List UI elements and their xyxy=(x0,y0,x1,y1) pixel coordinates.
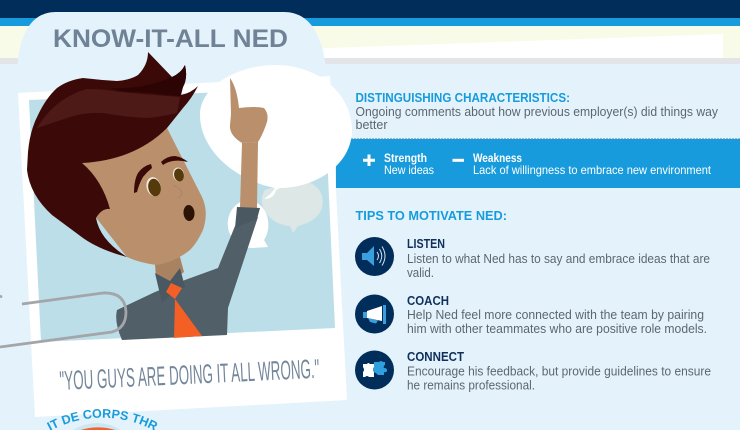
icon: puzzle pieces xyxy=(355,350,394,390)
right eyebrow xyxy=(161,156,188,165)
characteristics text: better xyxy=(356,117,388,132)
tip text: Encourage his feedback, but provide guidelines to ensure xyxy=(407,364,711,378)
grey bubble xyxy=(262,180,323,233)
weakness label: Weakness xyxy=(473,153,522,165)
small white bubble xyxy=(228,200,268,248)
icon: minus xyxy=(452,159,464,162)
badge: orange circle xyxy=(80,427,116,430)
arm xyxy=(240,142,258,208)
shirt xyxy=(116,217,258,340)
shirt collar xyxy=(155,268,185,303)
speech bubbles xyxy=(200,65,352,248)
hair xyxy=(27,52,198,257)
heading: tips: TIPS TO MOTIVATE NED: xyxy=(356,209,507,223)
face xyxy=(82,128,206,265)
neck xyxy=(155,257,184,283)
left eye xyxy=(145,176,162,197)
hair highlight xyxy=(37,89,180,128)
name tab xyxy=(17,12,326,70)
heading: distinguishing characteristics: DISTINGUISHING CHARACTERISTICS: xyxy=(356,91,570,105)
left eyebrow xyxy=(134,164,152,193)
nose xyxy=(173,185,182,198)
tip heading: COACH xyxy=(407,294,449,308)
strengths band xyxy=(336,138,740,188)
paper clip xyxy=(0,293,126,347)
tip text: valid. xyxy=(407,265,434,280)
weakness text: Lack of willingness to embrace new environment xyxy=(473,163,712,177)
shirt cuff xyxy=(235,207,260,228)
tip text: Help Ned feel more connected with the team by pairing xyxy=(407,307,704,322)
characteristics text: Ongoing comments about how previous employer(s) did things way xyxy=(356,104,718,119)
hand pointing up xyxy=(230,78,268,143)
tip: coach xyxy=(355,294,707,336)
hair shadow xyxy=(110,65,186,96)
icon: plus xyxy=(363,154,375,166)
tip text: he remains professional. xyxy=(407,378,535,392)
tip text: him with other teammates who are positive role models. xyxy=(407,321,707,336)
icon: megaphone xyxy=(355,294,394,334)
large white bubble xyxy=(200,65,352,199)
mouth xyxy=(183,205,195,221)
icon: speaker xyxy=(355,237,394,276)
badge: ring xyxy=(73,423,121,430)
tip text: Listen to what Ned has to say and embrace ideas that are xyxy=(407,251,710,266)
polaroid card xyxy=(18,76,347,417)
tie xyxy=(166,283,202,338)
strength label: Strength xyxy=(384,153,427,165)
infographic canvas: "YOU GUYS ARE DOING IT ALL WRONG." xyxy=(59,354,320,396)
tip heading: CONNECT xyxy=(407,350,464,364)
strength text: New ideas xyxy=(384,163,434,177)
title: KNOW-IT-ALL NED xyxy=(53,25,288,53)
panel: characteristics xyxy=(356,91,718,132)
tip: connect xyxy=(355,350,711,392)
tip heading: LISTEN xyxy=(407,237,445,251)
right eye xyxy=(172,167,185,182)
photo background xyxy=(29,88,335,342)
character: Ned xyxy=(27,52,268,340)
tip: listen xyxy=(355,237,710,280)
header bands xyxy=(0,0,740,64)
